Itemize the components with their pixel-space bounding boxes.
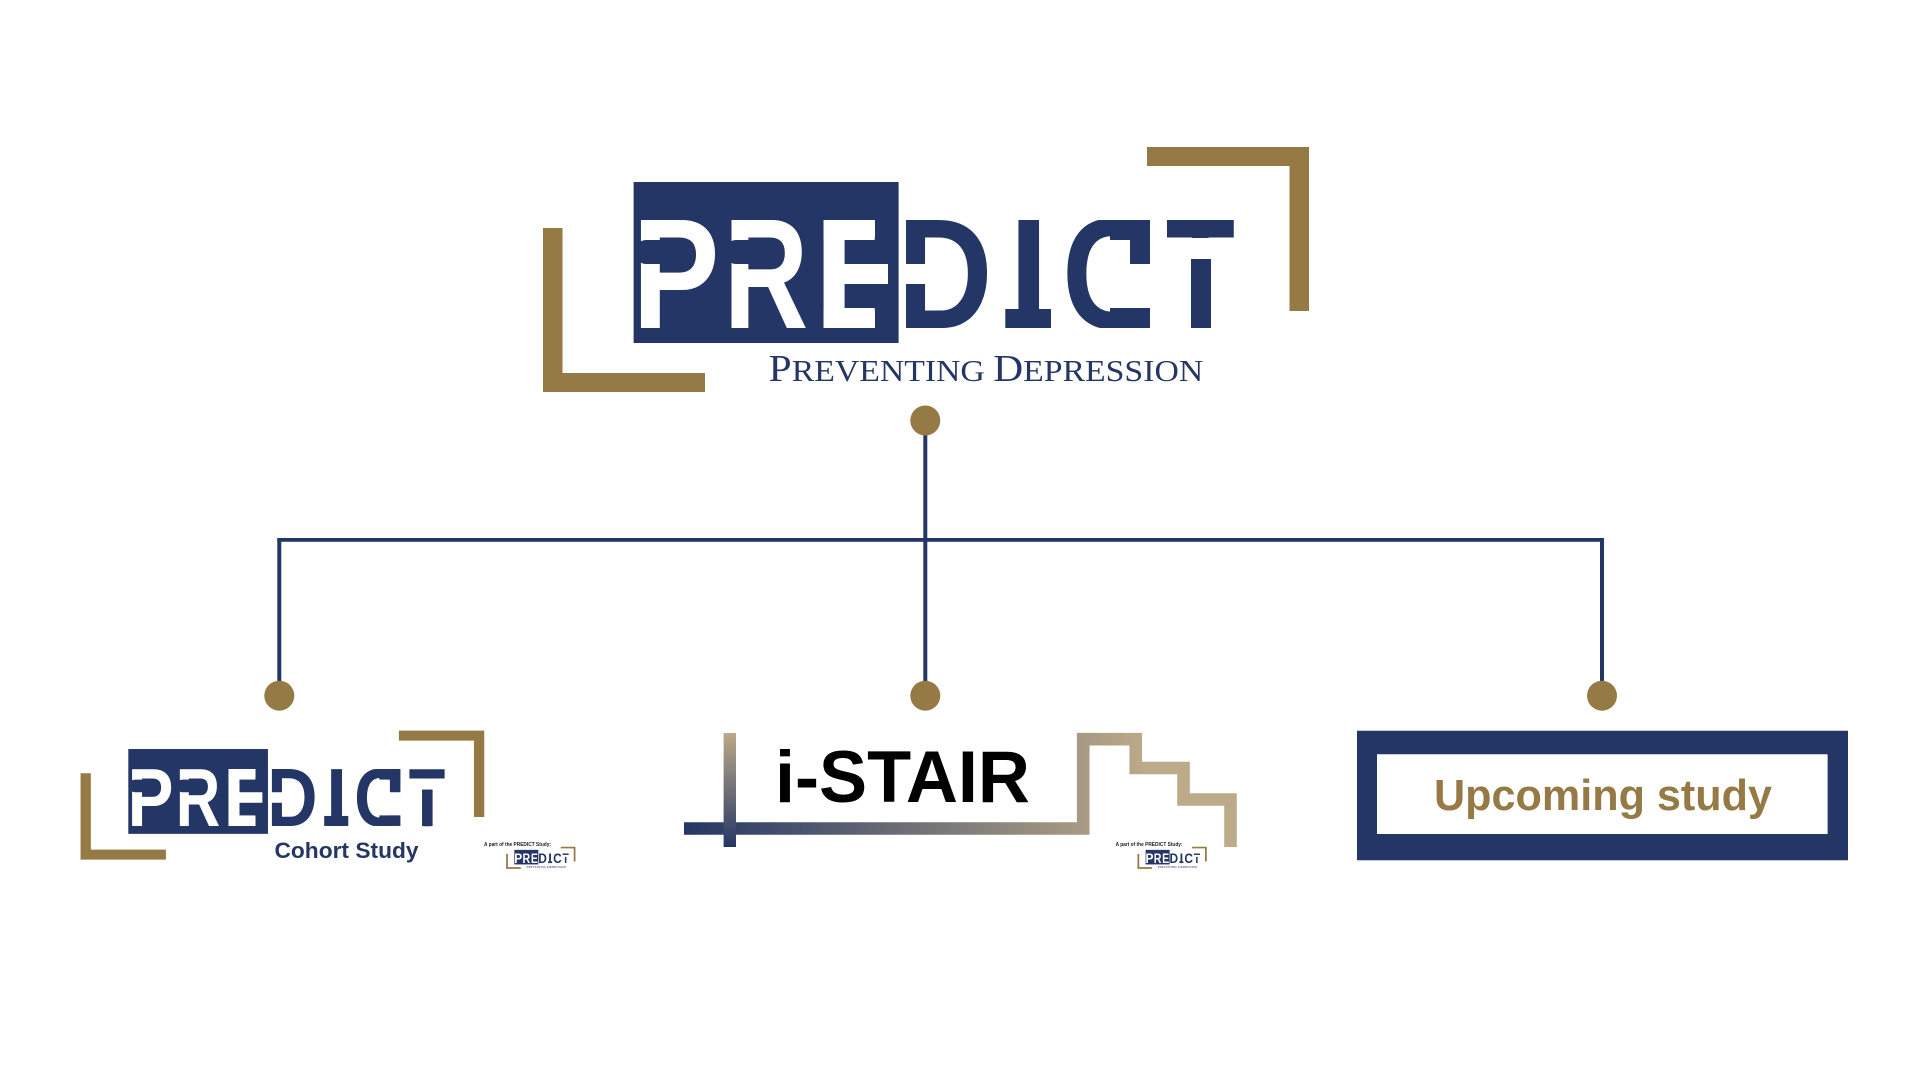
cohort caption mini logo: E — [531, 851, 538, 867]
i-STAIR logo — [684, 733, 1230, 847]
cohort caption mini logo: T — [562, 851, 569, 867]
cohort study label: Cohort Study — [274, 838, 419, 863]
panel: upcoming study — [1357, 731, 1848, 860]
cohort logo mark: T — [409, 751, 445, 844]
logo wordmark: C — [1062, 187, 1156, 362]
cohort caption mini logo: PREVENTING DEPRESSION — [527, 865, 566, 869]
i-STAIR caption mini logo: P — [1146, 851, 1153, 867]
i-STAIR caption mini logo: C — [1184, 851, 1193, 867]
cohort logo mark: D — [267, 751, 318, 844]
PREDICT Cohort Study logo — [81, 731, 484, 863]
node dot: cohort study — [264, 681, 294, 711]
i-STAIR caption mini logo — [1137, 847, 1207, 869]
i-STAIR caption mini logo: T — [1194, 851, 1200, 867]
tree connector lines — [277, 425, 1604, 685]
cohort logo mark: E — [224, 751, 265, 844]
upcoming study label: Upcoming study — [1434, 771, 1773, 820]
logo wordmark: P — [632, 187, 720, 362]
logo navy block — [634, 182, 899, 343]
cohort logo mark: C — [354, 751, 404, 844]
upcoming study frame — [1357, 731, 1848, 860]
logo wordmark: E — [816, 187, 894, 362]
logo wordmark: I — [1009, 187, 1049, 362]
logo wordmark: D — [897, 187, 993, 362]
cohort logo mark: R — [176, 751, 220, 844]
i-STAIR caption mini logo: R — [1154, 851, 1161, 867]
logo tagline: PREVENTING DEPRESSION — [769, 348, 1203, 390]
cohort caption mini logo: D — [538, 851, 547, 867]
cohort caption mini logo — [506, 847, 575, 869]
logo wordmark: R — [724, 187, 808, 362]
cohort logo mark — [81, 731, 484, 860]
logo wordmark: T — [1166, 187, 1235, 362]
i-STAIR stair line — [684, 739, 1230, 847]
logo bracket: top right — [1147, 147, 1309, 311]
cohort caption mini logo: R — [522, 851, 530, 867]
node dot: upcoming study — [1587, 681, 1617, 711]
cohort part-of caption — [484, 842, 575, 869]
cohort caption mini logo: P — [514, 851, 522, 867]
i-STAIR caption mini logo: E — [1162, 851, 1169, 867]
i-STAIR title: i-STAIR — [775, 737, 1030, 818]
node dot: i-STAIR — [910, 681, 940, 711]
cohort caption mini logo: C — [553, 851, 562, 867]
cohort caption text: A part of the PREDICT Study: — [484, 842, 551, 848]
i-STAIR crossing bar — [724, 733, 736, 847]
i-STAIR part-of caption — [1116, 842, 1207, 869]
i-STAIR caption mini logo: D — [1169, 851, 1178, 867]
cohort logo mark: I — [326, 751, 347, 844]
logo bracket: bottom left — [543, 228, 705, 392]
i-STAIR caption mini logo: PREVENTING DEPRESSION — [1158, 865, 1197, 869]
main PREDICT logo — [543, 147, 1309, 392]
i-STAIR caption mini logo: I — [1180, 851, 1183, 867]
i-STAIR caption text: A part of the PREDICT Study: — [1116, 842, 1183, 848]
node dot: PREDICT — [910, 406, 940, 436]
cohort logo mark: P — [128, 751, 174, 844]
cohort caption mini logo: I — [548, 851, 552, 867]
